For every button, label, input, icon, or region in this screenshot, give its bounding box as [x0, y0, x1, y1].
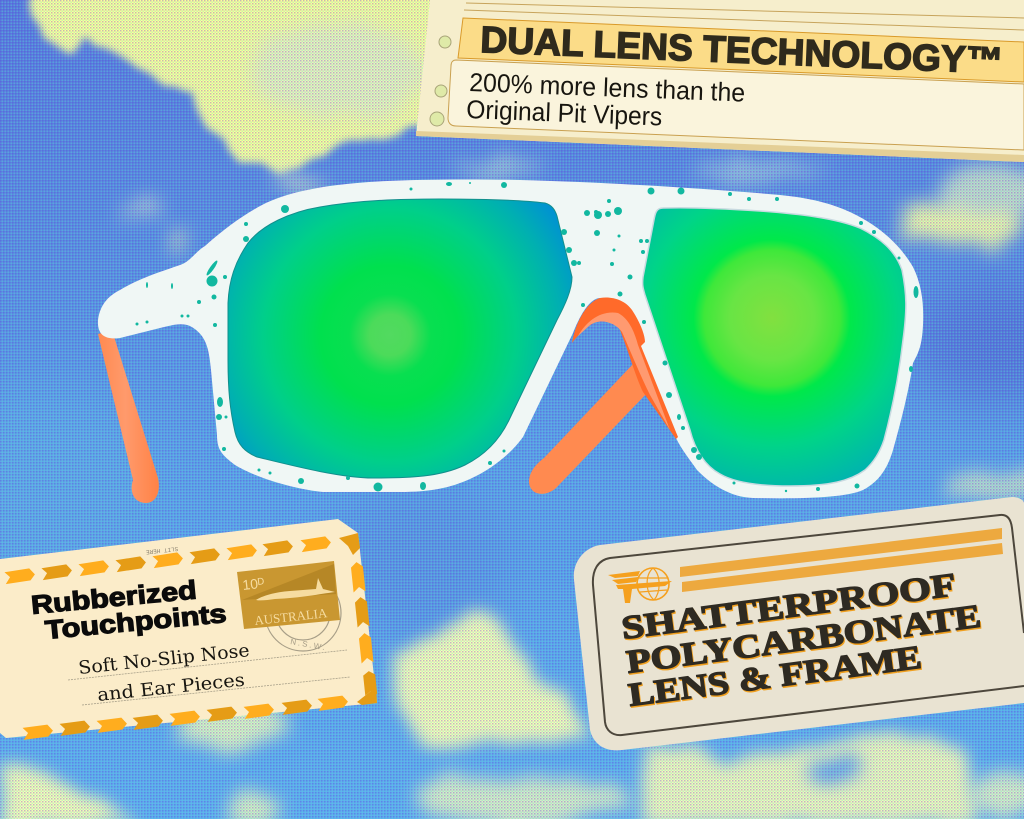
card headline: POLYCARBONATE [625, 600, 984, 682]
subheading text [466, 67, 746, 132]
airline card: shatterproof polycarbonate [574, 497, 1024, 750]
nose pad [572, 298, 678, 439]
slit here microtext: SLIT HERE [145, 545, 179, 556]
envelope heading: Touchpoints [44, 598, 228, 645]
inner text panel [448, 60, 1024, 150]
postmark: N.S.W. [290, 637, 328, 652]
card headline: LENS & FRAME [627, 641, 925, 715]
card headline: LENS & FRAME [626, 640, 924, 714]
airline logo: winged F and globe [608, 568, 672, 603]
orange bars [680, 528, 1003, 592]
punched holes [430, 36, 451, 126]
sunglasses [98, 179, 923, 503]
postage stamp: AUSTRALIA [254, 605, 328, 628]
subheading text: Original Pit Vipers [466, 94, 663, 132]
note ruled lines [464, 3, 1024, 30]
envelope body text: Soft No-Slip Nose [77, 640, 251, 679]
postmark [265, 575, 341, 652]
card headline [619, 567, 984, 715]
postage stamp: 10ᴰ [242, 575, 265, 593]
airmail chevron border [4, 533, 377, 740]
card headline: POLYCARBONATE [624, 599, 983, 681]
heading text: DUAL LENS TECHNOLOGY™ [480, 19, 1004, 81]
envelope body text: and Ear Pieces [96, 670, 246, 706]
left lens [228, 199, 572, 478]
top paper note: dual lens technology [416, 0, 1024, 162]
card headline: SHATTERPROOF [619, 567, 958, 647]
yellow heading band [458, 18, 1024, 82]
right lens [643, 208, 906, 486]
card headline: SHATTERPROOF [620, 569, 959, 648]
envelope body text [77, 640, 251, 706]
postage stamp [237, 561, 340, 629]
near ear piece arm [98, 330, 159, 503]
airmail envelope: rubberized touchpoints [0, 519, 377, 740]
frame [98, 179, 923, 498]
card inner border [593, 515, 1024, 735]
teal paint speckles [136, 182, 918, 492]
far ear piece arm [529, 364, 648, 494]
envelope heading [30, 574, 228, 645]
subheading text: 200% more lens than the [469, 67, 746, 108]
envelope ruled lines [68, 650, 350, 705]
envelope heading: Rubberized [30, 574, 198, 620]
